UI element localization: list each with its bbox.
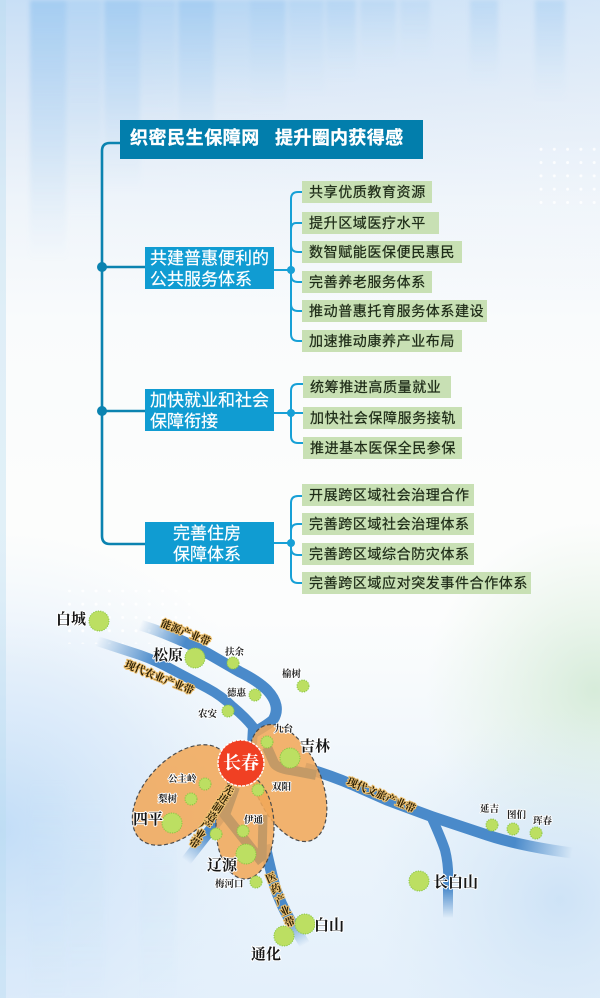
- list: public services: 数智赋能医保便民惠民: [309, 244, 455, 260]
- list: housing and governance: 完善跨区域综合防灾体系: [309, 546, 470, 562]
- list: public services: [302, 181, 487, 352]
- decorative dot grids: [67, 145, 600, 644]
- map: city cluster areas: [114, 713, 343, 879]
- area: Liaoyuan: [216, 775, 274, 879]
- map: city labels: 梨树: [158, 793, 178, 805]
- map: city labels: 白山: [314, 916, 344, 934]
- map: city labels: 通化: [251, 946, 281, 963]
- mind map connectors: [97, 143, 303, 583]
- category: 完善住房保障体系: 完善住房: [173, 524, 241, 543]
- list: public services: 加速推动康养产业布局: [309, 333, 455, 349]
- map: city nodes: [89, 611, 542, 946]
- belt: energy: [140, 625, 276, 734]
- map: belt labels: [123, 617, 418, 930]
- list: housing and governance: 开展跨区域社会治理合作: [309, 487, 470, 503]
- list: public services: 共享优质教育资源: [309, 184, 426, 200]
- list: employment and social security: 推进基本医保全民参保: [310, 440, 456, 456]
- belt: modern culture and tourism: [305, 768, 572, 853]
- list: public services: 推动普惠托育服务体系建设: [309, 303, 484, 319]
- category: 加快就业和社会保障衔接: 保障衔接: [150, 412, 218, 431]
- map: belt labels: 现代文旅产业带: [345, 775, 418, 816]
- belt: modern agriculture: [97, 641, 253, 745]
- title: 织密民生保障网: [130, 127, 260, 148]
- list: housing and governance: 完善跨区域应对突发事件合作体系: [309, 575, 528, 591]
- map: belt labels: 医药产业带: [263, 870, 298, 930]
- map: city labels: 松原: [153, 646, 184, 664]
- map: Changchun core: [218, 740, 264, 786]
- list: public services: 完善养老服务体系: [309, 274, 426, 290]
- map: belt labels: 能源产业带: [159, 617, 213, 649]
- map: city labels: 延吉: [480, 803, 500, 815]
- belt: advanced manufacturing: [186, 815, 222, 861]
- title: [120, 120, 423, 159]
- title: 提升圈内获得感: [275, 127, 403, 148]
- category: 共建普惠便利的公共服务体系: 公共服务体系: [150, 270, 252, 289]
- area: Jilin: [233, 713, 343, 853]
- category: 完善住房保障体系: [145, 522, 274, 564]
- map: city labels: 四平: [133, 811, 163, 828]
- map: belt labels: 先进制造产业带: [186, 781, 237, 851]
- list: employment and social security: 加快社会保障服务接轨: [310, 410, 456, 426]
- belt: Changbai Mountain branch: [431, 816, 448, 918]
- category: 加快就业和社会保障衔接: [145, 389, 274, 431]
- category: 完善住房保障体系: 保障体系: [173, 545, 241, 564]
- map: city labels: 梅河口: [215, 878, 244, 890]
- map: city labels: 双阳: [272, 781, 292, 793]
- list: public services: 提升区域医疗水平: [309, 215, 426, 231]
- map: belt labels: 现代农业产业带: [123, 658, 196, 698]
- map: city labels: 榆树: [282, 668, 302, 680]
- map: city labels: 扶余: [225, 646, 245, 658]
- category: 加快就业和社会保障衔接: 加快就业和社会: [150, 391, 269, 410]
- list: housing and governance: 完善跨区域社会治理体系: [309, 516, 470, 532]
- map: city labels: 辽源: [207, 857, 238, 874]
- map: city labels: 德惠: [227, 687, 248, 699]
- belt: medical: [265, 845, 305, 945]
- belt overlays inside areas: [267, 747, 316, 775]
- map: city labels: 珲春: [533, 815, 552, 827]
- map: city labels: 白城: [56, 610, 86, 628]
- category: 共建普惠便利的公共服务体系: [145, 247, 274, 289]
- area: Siping: [114, 727, 248, 863]
- list: employment and social security: [303, 376, 462, 459]
- map: city labels: 吉林: [300, 737, 330, 755]
- list: housing and governance: [302, 484, 531, 594]
- category: 共建普惠便利的公共服务体系: 共建普惠便利的: [150, 249, 269, 268]
- map: Changchun core: 长春: [223, 753, 259, 773]
- map: city labels: 九台: [274, 723, 294, 735]
- map: city labels: [56, 610, 552, 963]
- map: city labels: 图们: [507, 809, 526, 821]
- map: industrial belts: [97, 625, 572, 945]
- list: employment and social security: 统筹推进高质量就业: [310, 379, 441, 395]
- map: city labels: 公主岭: [168, 773, 197, 785]
- map: city labels: 长白山: [433, 873, 478, 891]
- map: city labels: 农安: [197, 708, 218, 720]
- map: city labels: 伊通: [244, 814, 264, 826]
